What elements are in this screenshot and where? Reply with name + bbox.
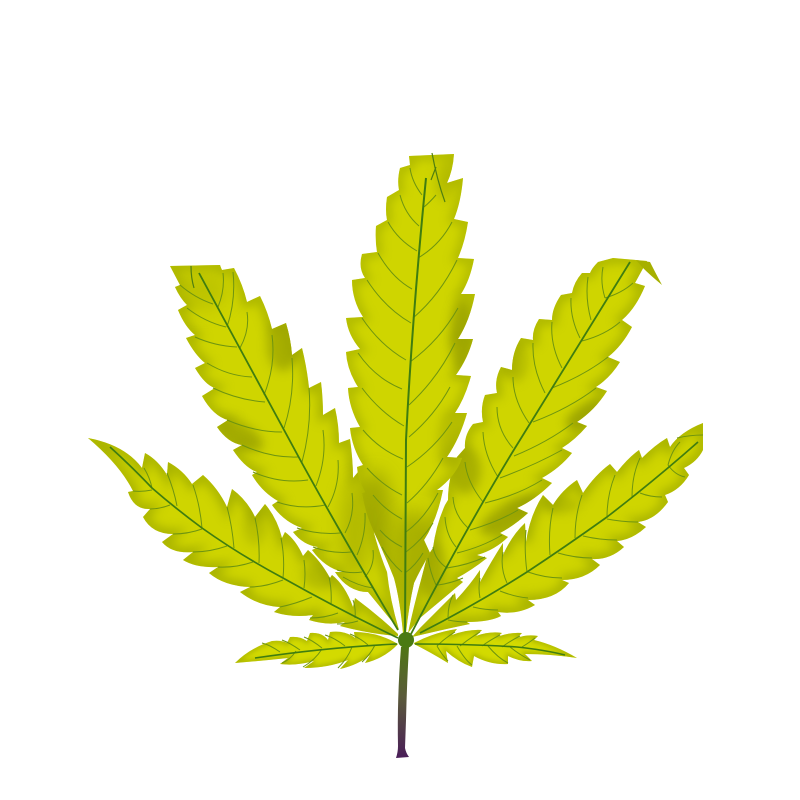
center veins: [358, 168, 458, 573]
upper left midrib: [199, 273, 398, 630]
leaflet: far left: [88, 438, 398, 638]
upper left shading: [170, 265, 399, 630]
far left midrib: [110, 447, 398, 638]
leaflet: far right: [412, 423, 703, 637]
illustration: yellowing leaf: [88, 152, 703, 758]
leaflet: upper left: [170, 265, 399, 630]
far left shading: [88, 438, 398, 636]
upper left veins: [180, 272, 373, 588]
leaflet: lower right small: [414, 629, 577, 667]
far right veins: [448, 435, 703, 622]
far right midrib: [420, 442, 698, 633]
leaflet: center: [346, 153, 475, 633]
leaflet: upper right: [408, 258, 662, 634]
upper right shading: [408, 258, 647, 633]
center midrib: [405, 178, 426, 633]
stem node: [398, 632, 414, 648]
far left veins: [133, 468, 358, 624]
leaflet: lower left small: [235, 632, 398, 669]
stem: [396, 647, 409, 758]
far right shading: [412, 423, 703, 637]
upper right midrib: [411, 262, 630, 634]
center shading: [346, 154, 475, 633]
upper right veins: [428, 267, 633, 585]
upper right tip spike: [636, 260, 662, 285]
upper left tip mark: [191, 266, 194, 288]
center tip mark: [431, 153, 445, 202]
